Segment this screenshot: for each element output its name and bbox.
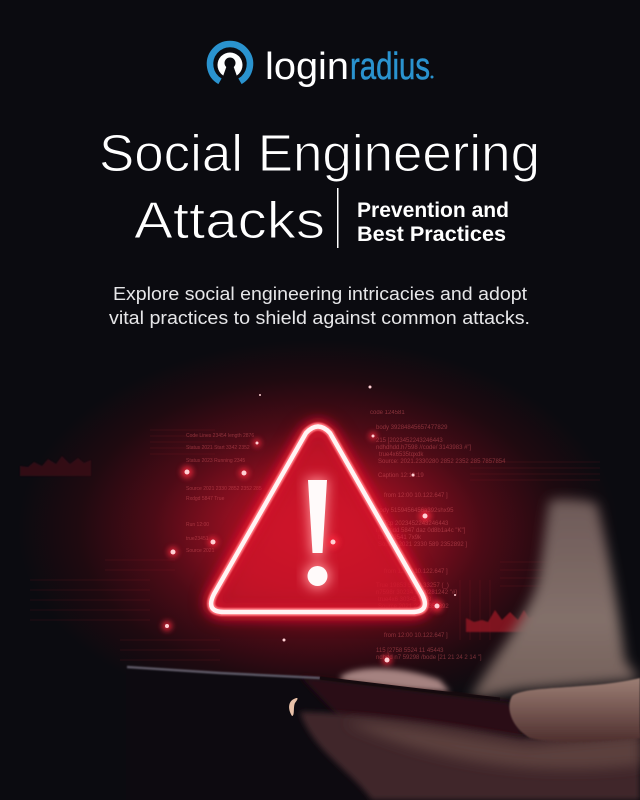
background data: faint code text: True 19853 5248 33257 (_) bbox=[376, 583, 449, 589]
description: Explore social engineering intricacies and adopt bbox=[113, 284, 527, 304]
logo mark bbox=[210, 44, 250, 82]
background data: faint code text: true23451 bbox=[186, 536, 209, 542]
description: vital practices to shield against common attacks. bbox=[109, 308, 530, 328]
exclamation mark bbox=[308, 480, 328, 586]
palm lighter area bbox=[345, 722, 640, 769]
logo wordmark: login bbox=[265, 46, 349, 88]
triangle neon halo bbox=[211, 426, 425, 612]
triangle outer glow bbox=[211, 426, 425, 612]
triangle neon stroke bbox=[211, 426, 425, 612]
title line one: Social Engineering bbox=[99, 125, 540, 183]
background data: faint code text: Tcp 2023452243246443 bbox=[384, 521, 449, 527]
chart block right bbox=[466, 610, 535, 632]
finger behind phone bbox=[340, 668, 450, 692]
alert triangle icon bbox=[211, 426, 425, 612]
background data: faint code text: code 124581 bbox=[370, 410, 405, 416]
background data: faint code text: Source: 2021.2330280 2852 2352 285 7857854 bbox=[378, 459, 506, 465]
nail highlight bbox=[289, 698, 298, 716]
background data: faint code text: true 23541 7x9k bbox=[378, 535, 422, 541]
logo bbox=[210, 44, 434, 88]
background data: faint code text: true4x6535tqxdk bbox=[379, 452, 424, 458]
background data: faint code text: from 12:00 10.122.647 ] bbox=[384, 633, 448, 639]
logo: radius bbox=[350, 46, 430, 88]
background data: faint code text: Status 2021 Start 3342 2352 bbox=[186, 445, 250, 451]
background data: faint code text: Code Lines 23454 length 2876 bbox=[186, 433, 254, 439]
phone top edge highlight bbox=[127, 667, 320, 678]
background data: grid lines bbox=[30, 430, 600, 660]
background data: faint code text: body 39284845657477829 bbox=[376, 425, 448, 431]
triangle interior bbox=[211, 426, 425, 612]
background data: faint code text: 115 [2758 5524 11 45443 bbox=[376, 648, 444, 654]
background data: faint code text: ndhdhdd 5847 daz 0d8b1a4c "K"] bbox=[376, 528, 466, 534]
background data: faint code text: n7598r 30234 3400281242 "#] bbox=[376, 590, 457, 596]
background data: faint code text: Caption 12:13:19 bbox=[378, 473, 424, 479]
description bbox=[109, 284, 530, 328]
subheading: Prevention and bbox=[357, 199, 509, 222]
background data: faint code text: Source 2021 2330 2852 2352 285 bbox=[186, 486, 262, 492]
background data: faint code text: body 5159456456a392shx95 bbox=[376, 508, 454, 514]
title divider bbox=[337, 188, 338, 248]
background data: faint code text: from 12:00 10.122.647 ] bbox=[384, 493, 448, 499]
background data: faint code text: Source 2021 232 2352892 bbox=[378, 604, 449, 610]
background data: faint code text: ndhdhdd.h7598 //code/ 3143983 #"] bbox=[376, 445, 472, 451]
palm of hand bbox=[300, 712, 640, 800]
thumb bbox=[509, 678, 640, 742]
subheading: Best Practices bbox=[357, 223, 506, 246]
background data: faint code text: Source 2021 2330 589 2352892 ] bbox=[378, 542, 467, 548]
background data: faint code text: ndhdd n7 59298 /bode [21 21 24 2 14 "] bbox=[376, 655, 482, 661]
background data: faint code text: Source 2021 bbox=[186, 548, 215, 554]
background data: faint code text: Status 2023 Running 2345 bbox=[186, 458, 245, 464]
background data: faint code text bbox=[186, 410, 506, 661]
glowing particles bbox=[162, 386, 456, 665]
smartphone bbox=[0, 667, 530, 800]
background data: faint code text: 215 [2023452243246443 bbox=[376, 438, 443, 444]
blurred moving finger bbox=[470, 499, 640, 700]
background data: faint code text: Rxdgd 5847 True bbox=[186, 496, 225, 502]
red glow backdrop bbox=[18, 340, 618, 720]
subheading bbox=[357, 199, 509, 246]
background data: faint code text: true4x6 30345 3053 bbox=[378, 597, 432, 603]
background data: faint code text: Run 12:00 bbox=[186, 522, 209, 528]
chart block left bbox=[20, 456, 91, 476]
exclamation mark glow bbox=[304, 478, 330, 589]
background data: faint code text: from 12:00 10.122.647 ] bbox=[384, 569, 448, 575]
title line two: Attacks bbox=[134, 192, 325, 250]
